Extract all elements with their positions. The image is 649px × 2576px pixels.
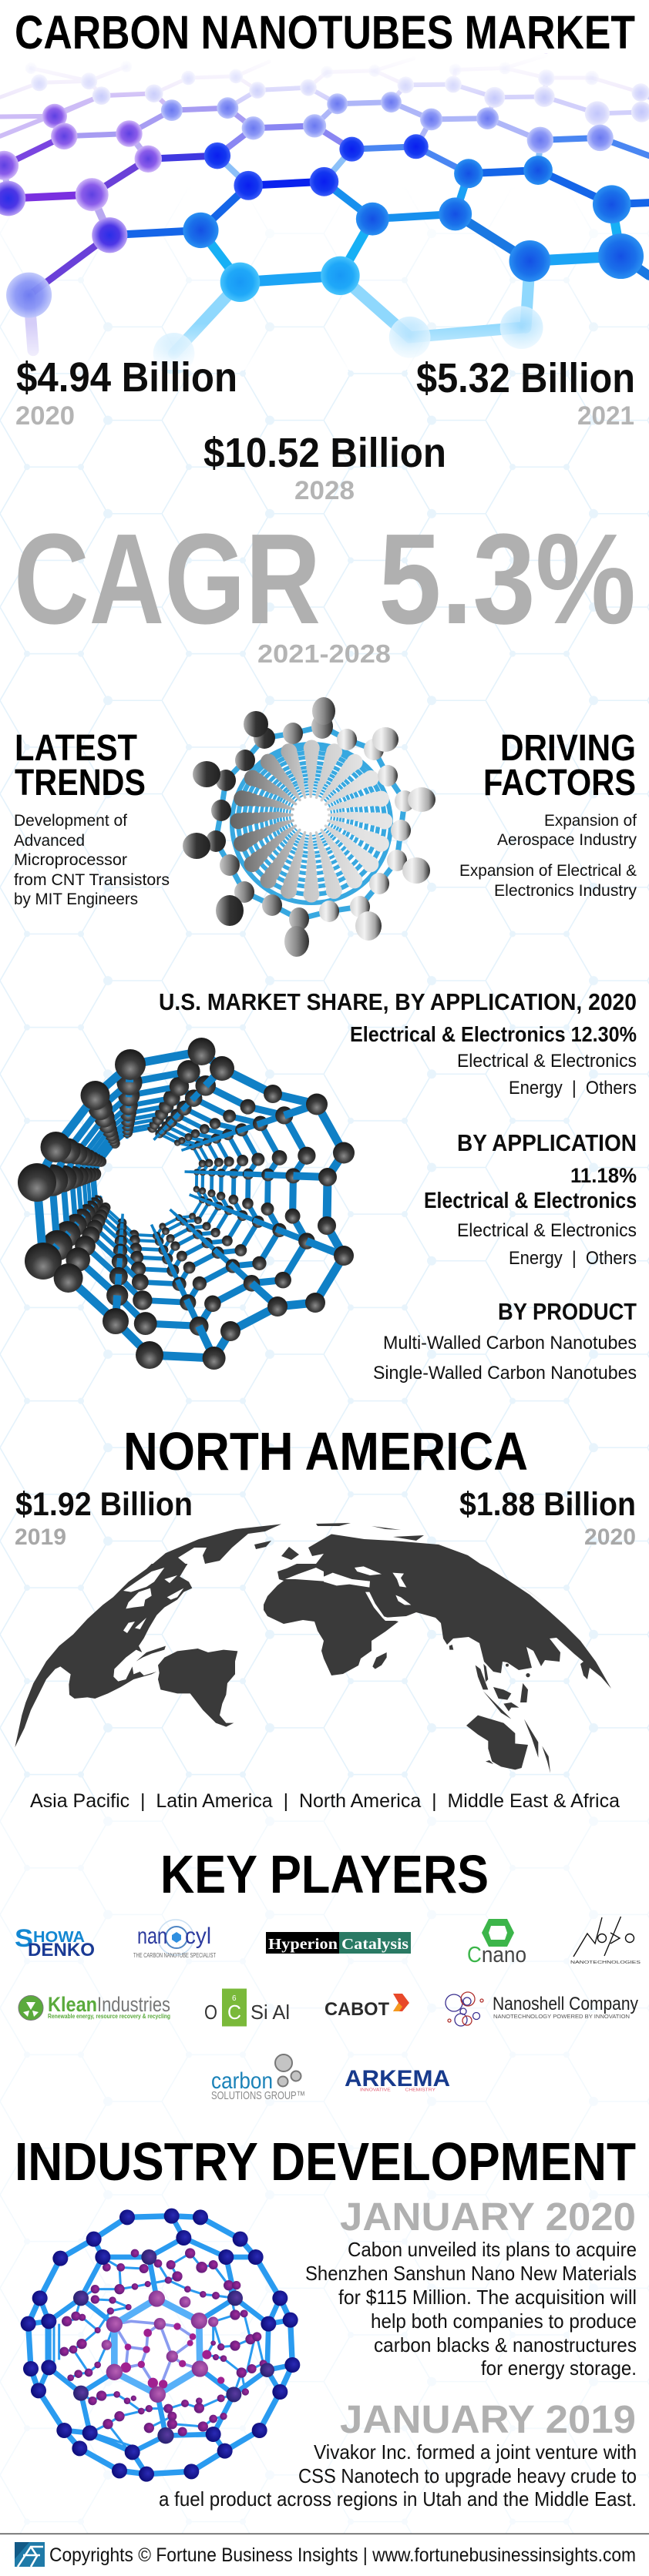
text: January 2020 description: help both companies to produce: [371, 2309, 637, 2333]
text: trend description: [14, 812, 170, 908]
heading: latest trends: LATEST: [15, 728, 137, 769]
CAGR headline: CAGR: [14, 508, 321, 651]
logo: Cabot: [324, 1994, 409, 2020]
stat: North America 2019: 2019: [15, 1524, 66, 1550]
CAGR headline: [14, 508, 636, 651]
development: January 2020: [305, 2195, 637, 2380]
logo: Carbon Solutions Group: [211, 2054, 305, 2102]
logo: Nopo Nanotechnologies: NANOTECHNOLOGIES: [570, 1961, 641, 1965]
hero image: nanotube hexagonal lattice: [0, 55, 649, 374]
logo: Cnano: Cnano: [467, 1943, 526, 1967]
logo: OCSiAl: [204, 1989, 290, 2026]
stat: 2021 market size: 2021: [577, 401, 634, 431]
heading: North America: NORTH AMERICA: [123, 1421, 528, 1481]
logo: Nanoshell Company: NANOTECHNOLOGY POWERED BY INNOVATION: [493, 2013, 630, 2020]
icon: Fortune Business Insights logo: [15, 2542, 45, 2567]
panel: by product: [373, 1298, 637, 1384]
logo: Nanocyl: cyl: [185, 1924, 211, 1949]
logo: OCSiAl: C: [227, 2001, 241, 2024]
logo: Klean Industries: Renewable energy, resource recovery & recycling: [48, 2013, 170, 2020]
text: trend description: Microprocessor: [14, 851, 127, 869]
text: January 2019 description: Vivakor Inc. formed a joint venture with: [314, 2440, 637, 2464]
logo: Showa Denko: S: [15, 1924, 33, 1952]
stat: North America 2020: [459, 1486, 636, 1550]
logo: Nopo Nanotechnologies: [570, 1917, 641, 1965]
heading: driving factors: [483, 728, 636, 803]
stat: 2028 market size: 2028: [294, 476, 355, 505]
logo: Hyperion Catalysis: [266, 1932, 411, 1954]
logo: Cabot: CABOT: [324, 1999, 389, 2020]
text: segments: Electrical & Electronics: [457, 1220, 637, 1241]
CAGR period: 2021-2028: [257, 639, 391, 668]
text: driving factors list: Expansion of Electrical &: [459, 862, 637, 880]
logo: Arkema: ARKEMA: [345, 2066, 450, 2091]
value: application share: [424, 1164, 637, 1213]
stat: 2020 market size: [15, 354, 237, 431]
text: January 2020 description: for energy storage.: [481, 2356, 637, 2380]
text: driving factors list: Electronics Industry: [494, 882, 637, 900]
panel: latest trends: [14, 728, 170, 908]
logo: OCSiAl: O: [204, 2001, 217, 2024]
text: January 2019 description: [159, 2440, 637, 2511]
text: product types: [373, 1333, 637, 1384]
text: driving factors list: Aerospace Industry: [497, 831, 637, 849]
stat: 2020 market size: $4.94 Billion: [16, 354, 237, 401]
text: segments: Energy | Others: [509, 1078, 637, 1098]
logo: Nanocyl: [133, 1920, 216, 1959]
text: trend description: by MIT Engineers: [14, 891, 138, 908]
image: fullerene cage: [21, 2209, 300, 2482]
text: January 2020 description: for $115 Million. The acquisition will: [338, 2286, 637, 2309]
logo: Nanoshell Company: [446, 1992, 638, 2026]
panel: driving factors: [459, 728, 637, 900]
logo: Hyperion Catalysis: Catalysis: [341, 1936, 409, 1953]
logo: Carbon Solutions Group: carbon: [211, 2068, 273, 2094]
stat: 2028 market size: $10.52 Billion: [203, 430, 446, 476]
stat: 2021 market size: [416, 355, 635, 431]
logo: Nanocyl: nan: [137, 1924, 167, 1949]
logo: Klean Industries: [18, 1993, 170, 2020]
value: application share: 11.18%: [570, 1164, 637, 1187]
text: trend description: Advanced: [14, 832, 85, 850]
logo: Nanocyl: THE CARBON NANOTUBE SPECIALIST: [133, 1952, 216, 1959]
stat: North America 2019: [15, 1486, 193, 1550]
footer: [15, 2542, 636, 2567]
text: January 2020 description: carbon blacks & nanostructures: [374, 2333, 637, 2356]
text: January 2020 description: [305, 2238, 637, 2380]
logo: Showa Denko: [15, 1924, 95, 1961]
stat: North America 2020: $1.88 Billion: [459, 1486, 636, 1523]
logo: Showa Denko: DENKO: [28, 1940, 95, 1961]
stat: 2020 market size: 2020: [15, 401, 75, 431]
text: product types: Single-Walled Carbon Nanotubes: [373, 1363, 637, 1384]
panel: by application: [424, 1129, 637, 1269]
heading: January 2020: JANUARY 2020: [340, 2195, 636, 2239]
development: January 2019: [159, 2397, 637, 2511]
stat: North America 2019: $1.92 Billion: [15, 1486, 193, 1523]
logo: Arkema: INNOVATIVE CHEMISTRY: [360, 2088, 436, 2092]
text: driving factors list: Expansion of: [544, 812, 637, 830]
logo: OCSiAl: Si Al: [251, 2001, 290, 2024]
image: nanotube perspective view with dark atoms: [18, 1038, 355, 1370]
logo: OCSiAl: 6: [232, 1994, 237, 2003]
heading: key players: KEY PLAYERS: [160, 1844, 489, 1904]
image: nanotube end view with white atoms: [183, 697, 435, 957]
text: driving factors list: [459, 812, 637, 900]
heading: January 2019: JANUARY 2019: [340, 2397, 636, 2441]
text: product types: Multi-Walled Carbon Nanotubes: [383, 1333, 637, 1353]
stat: North America 2020: 2020: [584, 1524, 636, 1550]
text: segments: [457, 1220, 637, 1269]
heading: latest trends: TRENDS: [15, 763, 146, 803]
panel: U.S. market share: [159, 988, 637, 1098]
heading: latest trends: [15, 728, 146, 803]
logo: Showa Denko: HOWA: [33, 1929, 85, 1946]
logo: Klean Industries: Industries: [97, 1993, 170, 2016]
text: regions list: Asia Pacific | Latin America | North America | Middle East & Africa: [30, 1790, 620, 1812]
logo: Cnano: [467, 1919, 526, 1967]
text: trend description: Development of: [14, 812, 127, 830]
logo: Carbon Solutions Group: SOLUTIONS GROUP™: [211, 2089, 305, 2102]
text: segments: Energy | Others: [509, 1248, 637, 1269]
logo: Hyperion Catalysis: Hyperion: [268, 1936, 338, 1953]
logo: Klean Industries: Klean: [48, 1993, 97, 2016]
text: trend description: from CNT Transistors: [14, 871, 170, 889]
stat: 2028 market size: [203, 430, 446, 505]
text: segments: [457, 1051, 637, 1098]
text: segments: Electrical & Electronics: [457, 1051, 637, 1072]
map: world globe: [15, 1523, 611, 1773]
